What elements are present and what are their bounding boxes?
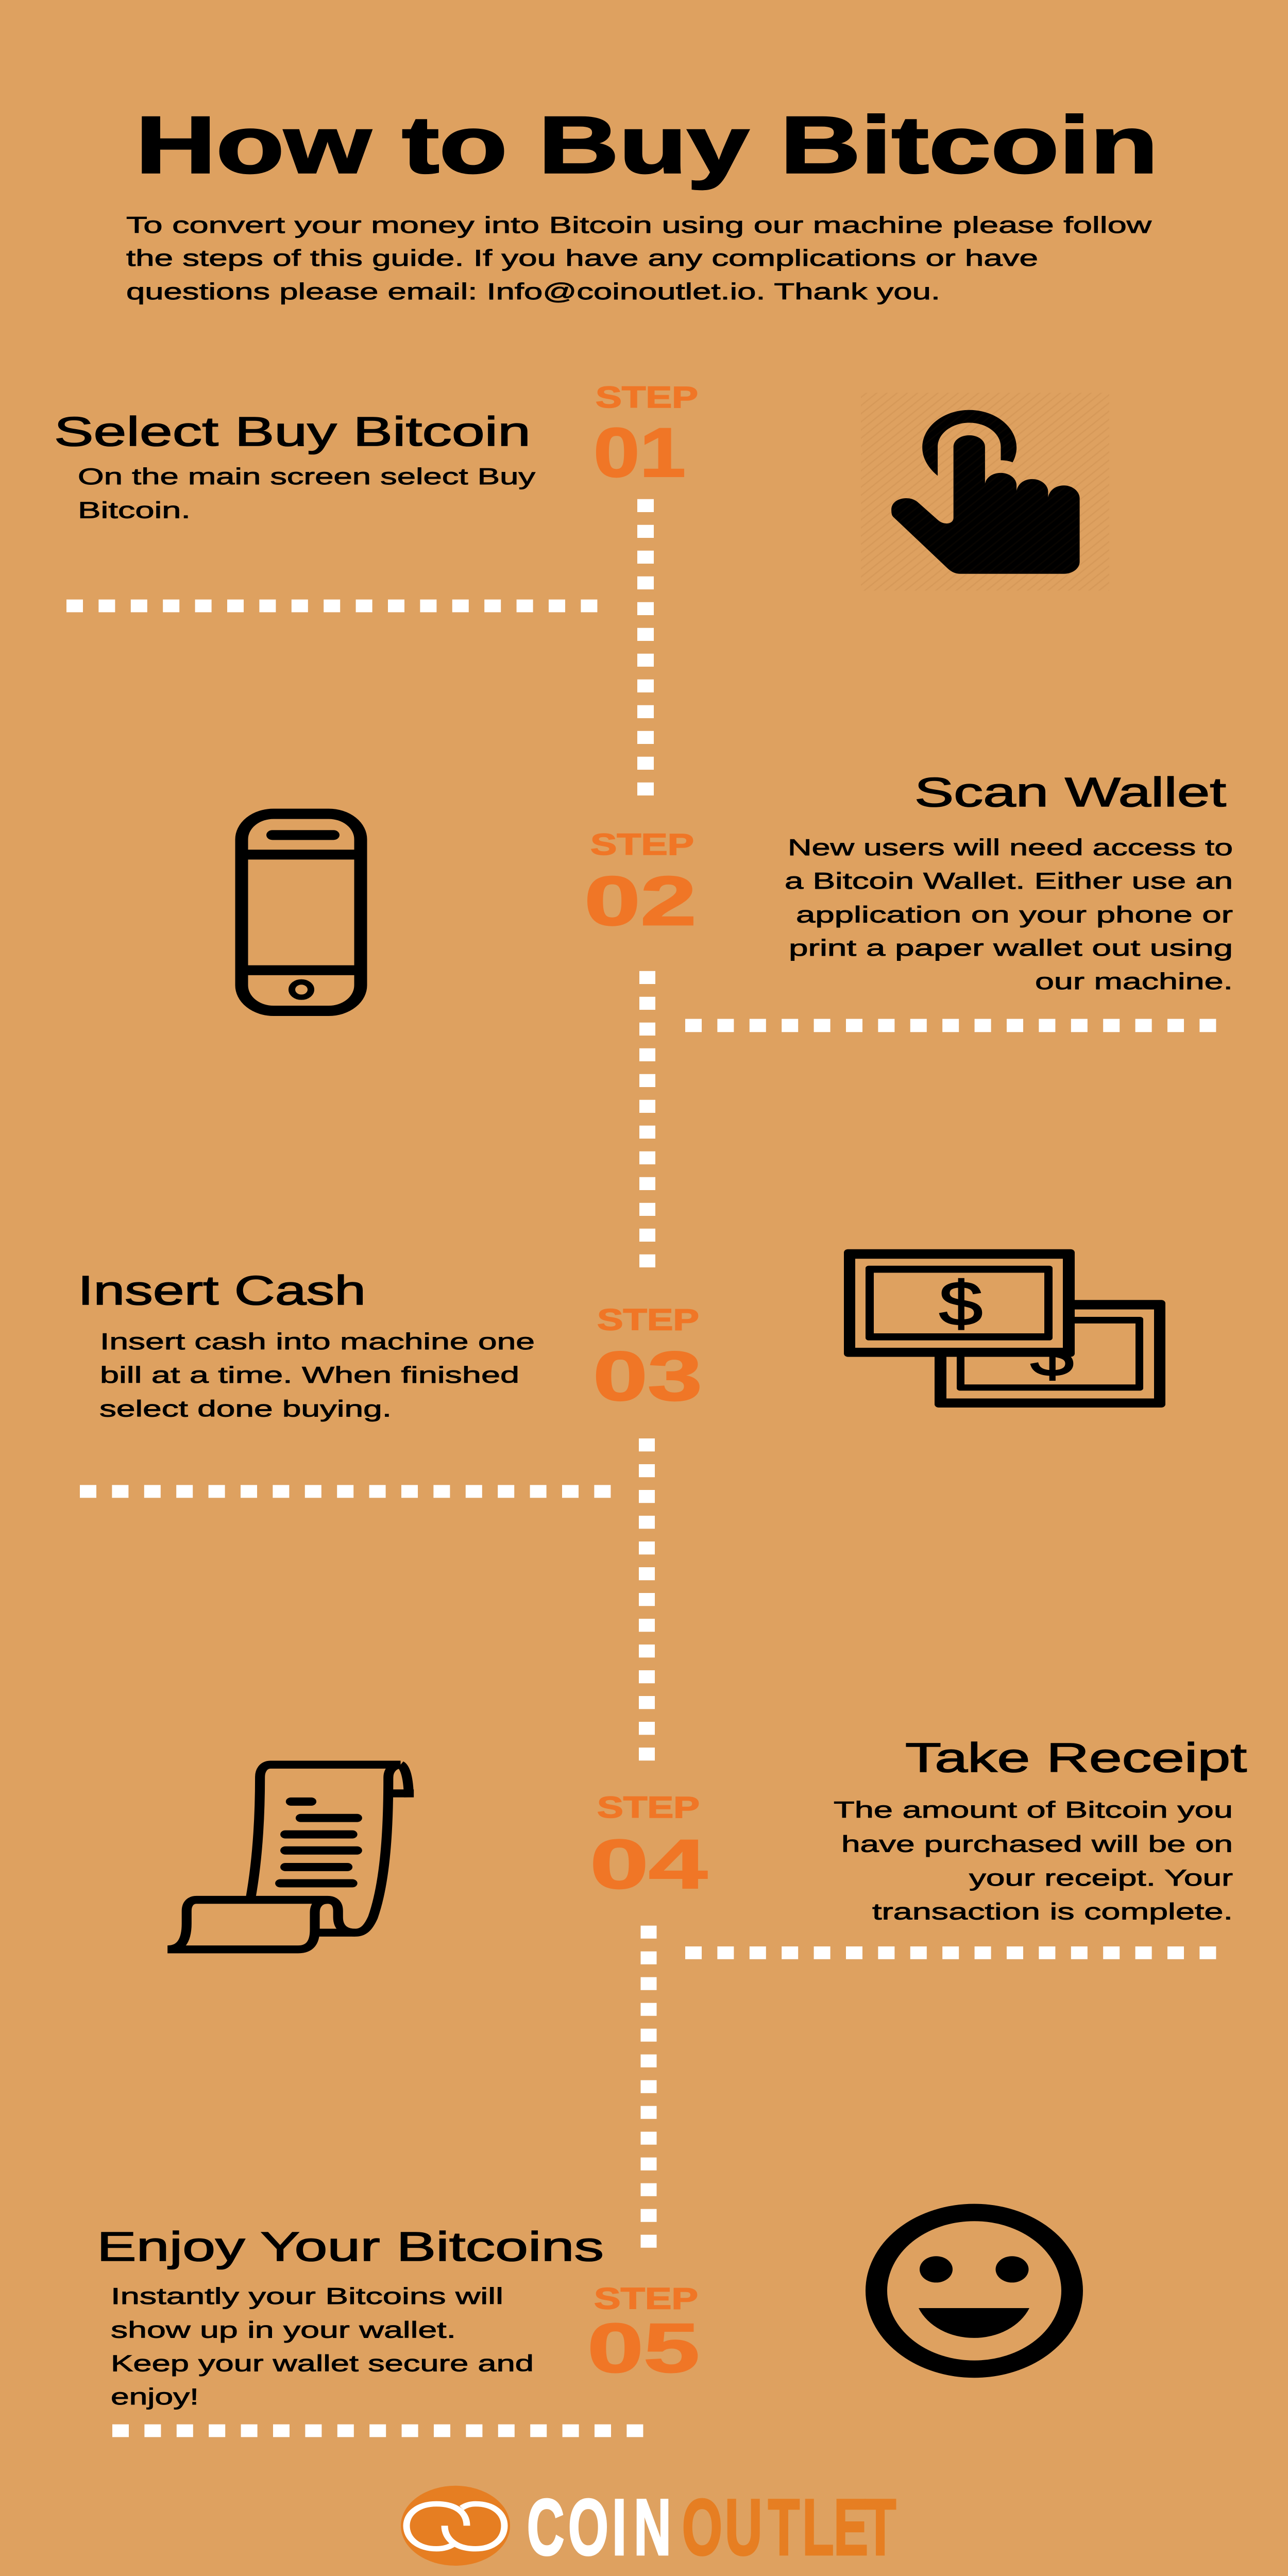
step 3 heading: Insert Cash xyxy=(78,1267,366,1314)
panel: step 1 xyxy=(54,381,1109,590)
connector: step 3 horizontal xyxy=(80,1483,612,1499)
logo wordmark: OUTLET: OUTLET xyxy=(682,2482,896,2572)
step 4 description xyxy=(834,1797,1233,1924)
logo: Coin Outlet xyxy=(401,2482,896,2572)
icon: banknotes: $ xyxy=(939,1268,982,1339)
step 2 label: STEP xyxy=(590,828,694,861)
connector: step 4 horizontal xyxy=(685,1945,1217,1961)
step 5 number: 05 xyxy=(587,2309,700,2387)
step 4 description: your receipt. Your xyxy=(969,1865,1233,1891)
title: How to Buy Bitcoin xyxy=(135,99,1158,190)
step 2 description: application on your phone or xyxy=(796,902,1233,927)
step 5 heading: Enjoy Your Bitcoins xyxy=(97,2224,604,2270)
intro text xyxy=(126,212,1152,304)
logo wordmark: COIN: COIN xyxy=(527,2482,671,2572)
step 3 number: 03 xyxy=(593,1337,702,1415)
step 5 description: show up in your wallet. xyxy=(111,2317,456,2343)
step 2 description: a Bitcoin Wallet. Either use an xyxy=(785,868,1233,894)
icon: banknotes xyxy=(844,1249,1165,1408)
step 3 description: Insert cash into machine one xyxy=(100,1329,535,1354)
step 5 description: enjoy! xyxy=(111,2384,199,2410)
step 1 label: STEP xyxy=(596,381,698,414)
step 1 description: Bitcoin. xyxy=(78,497,191,523)
step 2 description: our machine. xyxy=(1035,968,1233,994)
step 2 description xyxy=(785,834,1233,994)
step 3 description: bill at a time. When finished xyxy=(100,1362,519,1388)
panel: step 2 xyxy=(242,769,1233,1011)
step 4 description: have purchased will be on xyxy=(841,1831,1233,1857)
icon: smiling face xyxy=(876,2212,1072,2369)
step 5 description xyxy=(111,2283,534,2410)
step 4 number: 04 xyxy=(590,1825,707,1903)
step 3 description: select done buying. xyxy=(99,1396,392,1421)
intro text: the steps of this guide. If you have any complications or have xyxy=(126,245,1038,271)
step 1 description xyxy=(78,463,536,523)
step 2 heading: Scan Wallet xyxy=(914,769,1226,815)
step 3 label: STEP xyxy=(597,1303,699,1337)
icon: paper receipt xyxy=(167,1765,414,1950)
panel: step 3 xyxy=(78,1249,1165,1421)
step 5 description: Keep your wallet secure and xyxy=(111,2350,534,2376)
intro text: questions please email: Info@coinoutlet.io. Thank you. xyxy=(126,278,940,304)
icon: hand tapping xyxy=(861,393,1109,590)
step 3 description xyxy=(99,1329,535,1421)
icon: smartphone xyxy=(242,814,361,1011)
step 4 description: transaction is complete. xyxy=(872,1899,1233,1924)
connector: step 1 horizontal xyxy=(66,598,598,614)
step 1 number: 01 xyxy=(594,414,686,492)
step 2 description: New users will need access to xyxy=(788,834,1233,860)
icon: banknotes: $ xyxy=(1030,1319,1074,1389)
panel: step 5 xyxy=(97,2212,1072,2410)
step 4 heading: Take Receipt xyxy=(905,1735,1247,1781)
step 1 description: On the main screen select Buy xyxy=(78,463,536,489)
step 2 number: 02 xyxy=(584,862,697,940)
connector: vertical 3 xyxy=(639,1438,655,1760)
step 2 description: print a paper wallet out using xyxy=(789,935,1233,961)
step 1 heading: Select Buy Bitcoin xyxy=(54,409,531,454)
connector: vertical 2 xyxy=(639,971,655,1267)
intro text: To convert your money into Bitcoin using our machine please follow xyxy=(126,212,1152,238)
connector: vertical 1 xyxy=(637,499,654,795)
step 4 label: STEP xyxy=(597,1791,700,1824)
step 4 description: The amount of Bitcoin you xyxy=(834,1797,1233,1823)
step 5 label: STEP xyxy=(594,2282,698,2316)
panel: step 4 xyxy=(167,1735,1247,1950)
logo mark: interlocked rings xyxy=(401,2486,510,2566)
connector: step 2 horizontal xyxy=(685,1017,1217,1033)
step 5 description: Instantly your Bitcoins will xyxy=(111,2283,503,2309)
connector: vertical 4 xyxy=(641,1926,656,2248)
connector: step 5 horizontal xyxy=(112,2422,644,2439)
